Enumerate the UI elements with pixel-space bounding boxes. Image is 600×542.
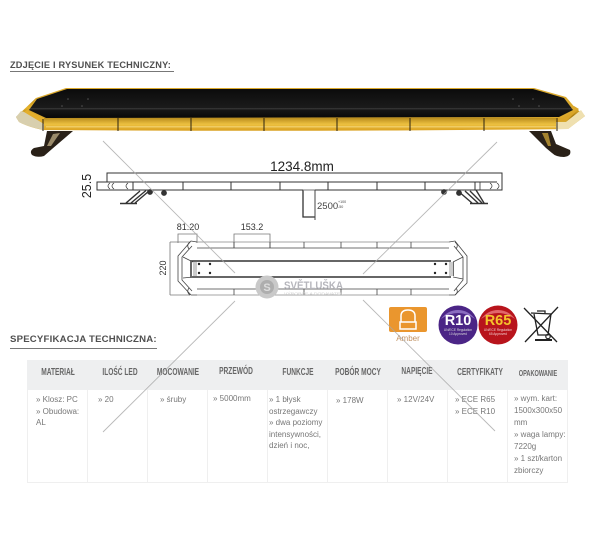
cable with dimension <box>303 190 346 220</box>
cell: voltage <box>388 390 448 483</box>
dimension labels: 81.20 <box>177 222 199 232</box>
cable with dimension: -50 <box>338 205 343 209</box>
column header: LED count: ILOŚĆ LED <box>102 367 138 378</box>
badge: R10 certification <box>438 306 478 344</box>
right mount <box>442 190 488 204</box>
cell: certificates <box>448 390 508 483</box>
cell: packaging: zbiorczy <box>514 466 543 475</box>
watermark: logo: S <box>263 282 271 294</box>
cell: LED count: » 20 <box>98 395 114 404</box>
dimension labels: 220 <box>158 260 168 276</box>
cell: power <box>328 390 388 483</box>
column header: mounting: MOCOWANIE <box>157 367 199 378</box>
table header row <box>27 360 568 390</box>
cell: mounting <box>148 390 208 483</box>
watermark: logo: SVĚTLUŠKA <box>284 279 343 292</box>
cell: functions: ostrzegawczy <box>269 406 317 416</box>
cell: packaging: mm <box>514 418 527 427</box>
cable with dimension: 2500 <box>317 201 338 212</box>
icon: amber beacon: Amber <box>396 334 420 343</box>
dimension labels: 153.2 <box>241 222 263 232</box>
cell: power: » 178W <box>336 396 364 405</box>
left mount <box>120 190 166 204</box>
dimension: length: 1234.8mm <box>270 159 334 174</box>
watermark: logo <box>256 276 343 298</box>
column header: certificates: CERTYFIKATY <box>457 367 503 378</box>
dimension: height: 25.5 <box>80 174 94 198</box>
badge: R10 certification: UN/ECE Regulation <box>444 328 472 332</box>
badge: R10 certification: R10 <box>445 313 471 329</box>
column header: power: POBÓR MOCY <box>335 367 381 378</box>
left end cap <box>178 241 211 295</box>
top-view technical drawing <box>158 222 468 296</box>
cell: certificates: » ECE R65 <box>455 395 495 404</box>
side view of bar <box>97 173 502 190</box>
cell: LED count <box>88 390 148 483</box>
dimension lines <box>170 234 270 295</box>
dimension labels <box>158 222 263 276</box>
column header: material: MATERIAŁ <box>41 367 74 378</box>
cell: material: AL <box>36 418 46 427</box>
watermark: logo: VÝROBCE A DODAVATEL <box>284 292 343 296</box>
amber lens band <box>16 98 585 131</box>
column header: functions: FUNKCJE <box>282 367 314 378</box>
cell: packaging: 7220g <box>514 442 536 451</box>
column header: packaging: OPAKOWANIE <box>519 368 557 378</box>
right end cap <box>434 241 467 295</box>
side-view technical drawing <box>80 159 502 220</box>
icon: crossed-out waste bin <box>524 306 558 342</box>
badge: R65 certification: R65 <box>485 313 511 329</box>
cell: material <box>27 390 88 483</box>
cell: cable <box>208 390 268 483</box>
cell: functions: dzień i noc, <box>269 441 309 450</box>
cell: functions <box>268 390 328 483</box>
cable with dimension: +100 <box>338 200 346 204</box>
cell: functions: » 1 błysk <box>269 395 301 404</box>
badge: R65 certification: UN/ECE Regulation <box>484 328 512 332</box>
light bar product photo <box>16 88 585 157</box>
black top panel <box>28 88 577 118</box>
badge: R65 certification <box>478 306 518 344</box>
bar body lines <box>190 242 451 295</box>
cell: packaging: 1500x300x50 <box>514 406 562 415</box>
cell: packaging: » wym. kart: <box>514 394 557 403</box>
cell: voltage: » 12V/24V <box>397 395 434 404</box>
heading: technical specification: SPECYFIKACJA TECHNICZNA: <box>10 334 157 345</box>
badge: R10 certification: 10 Approved <box>449 332 467 336</box>
cell: functions: » dwa poziomy <box>269 418 322 427</box>
cell: cable: » 5000mm <box>213 394 251 403</box>
cell: packaging: » 1 szt/karton <box>514 454 562 463</box>
cell: packaging: » waga lampy: <box>514 430 566 439</box>
column header: cable: PRZEWÓD <box>219 366 253 377</box>
badge: R65 certification: 65 Approved <box>489 332 507 336</box>
icon: amber beacon <box>389 307 427 343</box>
right bracket <box>529 131 570 157</box>
cell: material: » Klosz: PC <box>36 395 78 404</box>
cell: material: » Obudowa: <box>36 406 79 416</box>
cell: mounting: » śruby <box>160 395 186 404</box>
cell: packaging <box>508 390 568 483</box>
cell: functions: intensywności, <box>269 430 321 438</box>
left bracket <box>31 131 73 157</box>
heading: photo and technical drawing: ZDJĘCIE I RYSUNEK TECHNICZNY: <box>10 60 171 70</box>
column header: voltage: NAPIĘCIE <box>401 366 433 377</box>
cell: certificates: » ECE R10 <box>455 406 495 416</box>
